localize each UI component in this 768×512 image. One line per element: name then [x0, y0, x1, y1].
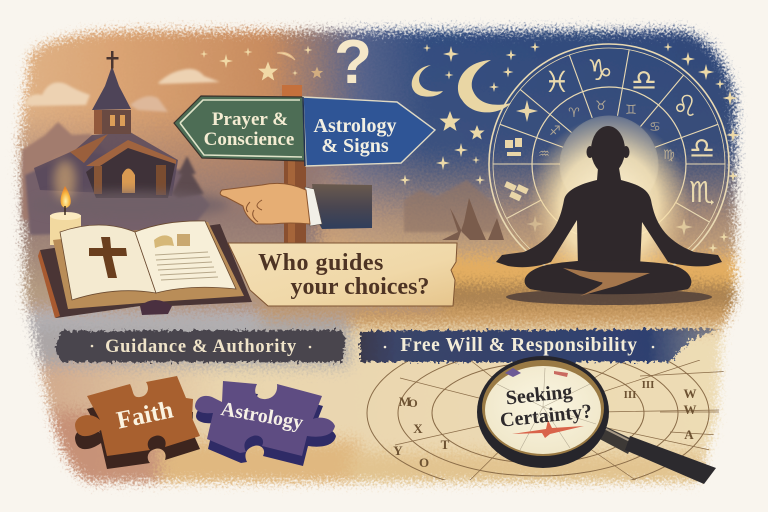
- candle: [50, 160, 81, 245]
- lens gold edge: [482, 360, 604, 456]
- open book: [38, 221, 252, 318]
- blue sign: [303, 97, 435, 166]
- ground brown band: [440, 284, 760, 308]
- zodiac glyphs: [538, 53, 715, 209]
- grey wash behind left strip: [0, 316, 350, 366]
- puzzle piece: Astrology: Astrology: [219, 398, 305, 434]
- pointing hand: [220, 183, 372, 229]
- ground shadow: [506, 289, 712, 305]
- left strip: Guidance & Authority: Guidance & Authority: [105, 337, 297, 357]
- meditating silhouette: [496, 126, 722, 294]
- magnifying glass: Seeking: [505, 381, 573, 409]
- crescent moons: [412, 60, 511, 112]
- crossed shin highlight: [563, 268, 650, 296]
- chart marks: W: [684, 402, 696, 417]
- red compass mark: [512, 420, 584, 438]
- zodiac glyphs: ♎︎: [631, 63, 657, 97]
- warm horizon wash: [47, 64, 748, 317]
- zodiac glyphs: ♎︎: [689, 131, 715, 165]
- question banner: [228, 243, 457, 306]
- inner ring glyphs: ♋︎: [649, 120, 661, 135]
- chart marks: M: [399, 394, 411, 409]
- chart marks: X: [413, 421, 423, 436]
- bookmark: [140, 300, 172, 315]
- inner ring glyphs: ♍︎: [663, 148, 675, 163]
- chart marks: O: [408, 396, 418, 410]
- inner ring glyphs: ♊︎: [625, 103, 637, 118]
- handle: [625, 436, 716, 484]
- church tower: [94, 110, 131, 134]
- zodiac wheel: [489, 44, 729, 284]
- trees: [442, 198, 504, 240]
- distant mountains and trees right: [404, 180, 504, 240]
- tan wash under puzzle: [160, 440, 360, 500]
- chart marks: Y: [393, 443, 403, 458]
- green sign: [174, 96, 305, 161]
- astrological chart: [366, 360, 724, 480]
- salmon wash lower left: [48, 402, 174, 492]
- chart marks: III: [624, 389, 636, 401]
- ground gold: [300, 256, 768, 286]
- sky gradient: [0, 0, 768, 310]
- left page: [60, 225, 156, 300]
- magnifying glass: Certainty?: [499, 400, 593, 432]
- chart marks: A: [684, 427, 694, 442]
- church wing: [34, 132, 178, 196]
- puzzle piece: Faith: Faith: [114, 396, 176, 435]
- left strip: Guidance & Authority: [55, 330, 346, 362]
- sky stars left: [200, 46, 323, 81]
- lens: [485, 366, 601, 454]
- chart marks: T: [441, 437, 450, 452]
- night stars: [400, 42, 740, 253]
- crossed legs: [525, 260, 691, 294]
- zodiac blocky marks: [504, 100, 692, 236]
- suit sleeve: [312, 184, 372, 229]
- zodiac glyphs: ♏︎: [689, 175, 715, 209]
- distant mountains left: [22, 69, 220, 235]
- blue sign: Astrology: [314, 115, 396, 137]
- inner ring glyphs: ♐︎: [549, 124, 561, 139]
- chart marks: W: [684, 386, 696, 401]
- signpost: [174, 85, 435, 245]
- inner ring glyphs: [538, 99, 675, 163]
- torso and arms: [496, 168, 722, 268]
- clouds: [24, 82, 90, 106]
- magnifying glass: [477, 356, 716, 484]
- lens rim: [477, 356, 609, 468]
- large moon: [458, 60, 511, 112]
- church body: [86, 142, 176, 198]
- post top: [282, 85, 302, 98]
- right strip: Free Will & Responsibility: Free Will & Responsibility: [400, 335, 638, 356]
- church door: [122, 168, 135, 193]
- right page: [135, 221, 236, 293]
- tan wash under chart: [350, 452, 710, 502]
- green sign: Conscience: [204, 129, 294, 150]
- green sign: Prayer &: [212, 109, 288, 130]
- right strip: Free Will & Responsibility: [360, 329, 720, 362]
- head: [591, 126, 625, 174]
- steeple: [92, 66, 131, 110]
- post: [284, 155, 306, 245]
- puzzle piece: Astrology: [195, 381, 336, 466]
- chart marks: O: [419, 455, 429, 470]
- small moon: [412, 65, 443, 97]
- pine tree near church: [172, 156, 204, 198]
- right page text lines: [155, 252, 218, 280]
- puzzle piece: Faith: [75, 376, 200, 469]
- question banner: Who guides: [258, 250, 384, 276]
- steeple cross: [106, 51, 118, 68]
- ground lower gold: [260, 306, 750, 328]
- halo behind figure: [527, 117, 691, 293]
- shirt cuff: [305, 187, 322, 226]
- hand: [220, 183, 310, 224]
- church: [34, 51, 178, 198]
- book cover: [40, 224, 252, 318]
- chart marks: [393, 379, 696, 470]
- lower parchment section: [30, 316, 732, 489]
- page block: [53, 222, 244, 309]
- zodiac glyphs: ♌︎: [672, 89, 698, 123]
- chart marks: III: [642, 379, 654, 391]
- question mark: ?: [334, 28, 372, 97]
- inner ring glyphs: ♒︎: [538, 147, 550, 162]
- inner ring glyphs: ♈︎: [568, 106, 580, 121]
- mauve hills haze: [0, 110, 320, 320]
- right page image: [154, 235, 174, 248]
- inner ring glyphs: ♉︎: [595, 99, 607, 114]
- cross on page: [89, 237, 127, 278]
- zodiac glyphs: ♓︎: [544, 65, 570, 99]
- zodiac glyphs: ♑︎: [587, 53, 613, 87]
- ferrule: [594, 424, 634, 454]
- blue sign: & Signs: [321, 135, 389, 157]
- haze at church foot: [30, 191, 230, 219]
- question banner: your choices?: [291, 274, 429, 300]
- flame: [61, 186, 71, 208]
